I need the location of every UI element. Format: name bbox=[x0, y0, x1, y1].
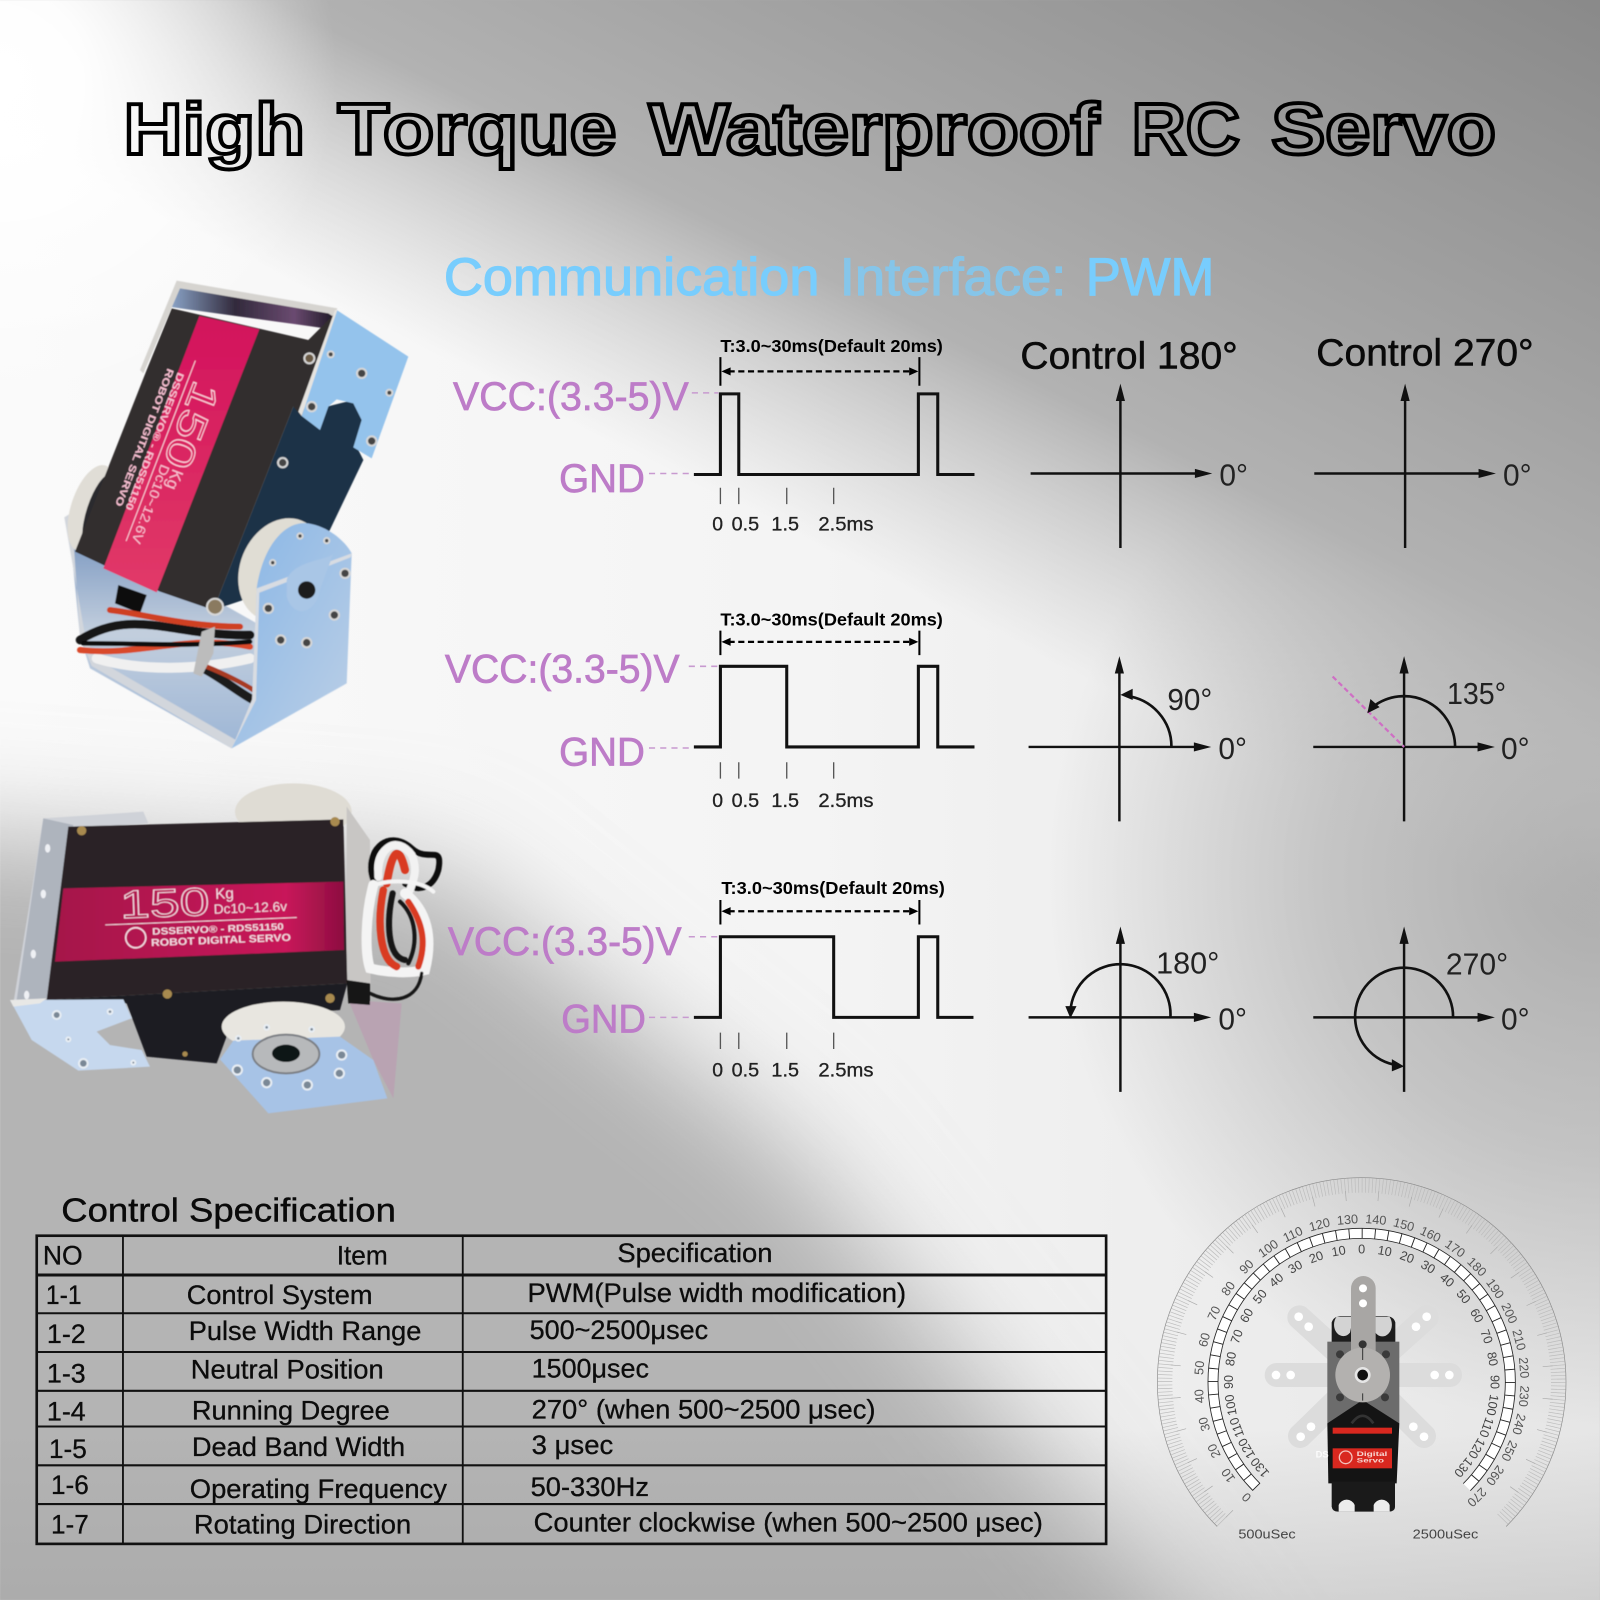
axes: 90 degrees: 0° bbox=[1218, 732, 1247, 766]
row 1-7: Counter clockwise (when 500~2500 μsec) bbox=[534, 1508, 1043, 1538]
dial outer degree labels: 90 bbox=[1237, 1257, 1257, 1277]
row 1-5 bbox=[49, 1430, 613, 1464]
icon: digital servo: Servo bbox=[1357, 1457, 1384, 1464]
dial inner degree labels: 50 bbox=[1453, 1287, 1473, 1307]
heading: communication interface bbox=[444, 248, 1214, 307]
title: RC bbox=[1132, 89, 1240, 170]
dial outer degree labels: 230 bbox=[1516, 1385, 1532, 1407]
dial inner degree labels: 70 bbox=[1477, 1328, 1495, 1346]
row 1-4: 270° (when 500~2500 μsec) bbox=[532, 1394, 876, 1424]
timing scale: 1.5 bbox=[771, 790, 799, 812]
band lettering: Kg bbox=[215, 885, 234, 903]
timing scale: 0.5 bbox=[732, 790, 759, 812]
axes: 270 degrees: 270° bbox=[1446, 947, 1508, 981]
timing scale: 0.5 bbox=[732, 1060, 759, 1082]
voltage labels: VCC:(3.3-5)V bbox=[448, 920, 682, 964]
icon: digital servo: DS bbox=[1316, 1449, 1329, 1459]
axes: 180 degrees: 180° bbox=[1156, 946, 1219, 980]
dial inner degree labels: 60 bbox=[1237, 1306, 1256, 1325]
waveform bbox=[694, 666, 974, 747]
dial inner degree labels: 10 bbox=[1377, 1243, 1393, 1259]
dial inner degree labels: 90 bbox=[1487, 1375, 1501, 1389]
heading: communication interface: Communication bbox=[444, 248, 819, 307]
period label bbox=[720, 878, 945, 924]
voltage labels bbox=[448, 920, 718, 1042]
row 1-2: 500~2500μsec bbox=[530, 1315, 708, 1345]
period label: T:3.0~30ms(Default 20ms) bbox=[720, 336, 943, 356]
dial inner degree labels: 80 bbox=[1223, 1351, 1239, 1367]
dial inner degree labels: 40 bbox=[1266, 1270, 1286, 1290]
voltage labels bbox=[453, 375, 718, 501]
row 1-1: 1-1 bbox=[46, 1280, 82, 1310]
dial outer degree labels: 240 bbox=[1509, 1412, 1528, 1436]
dial outer degree labels: 180 bbox=[1464, 1255, 1489, 1279]
band lettering bbox=[104, 877, 298, 951]
dial outer degree labels: 50 bbox=[1192, 1360, 1207, 1375]
photo: servo in upright bracket bbox=[58, 281, 408, 748]
band lettering: 150 bbox=[154, 375, 228, 475]
faded horn positions bbox=[1272, 1312, 1454, 1441]
dial outer degree labels: 220 bbox=[1516, 1357, 1532, 1379]
dial inner degree labels: 120 bbox=[1465, 1436, 1488, 1461]
row 1-2 bbox=[47, 1315, 708, 1349]
band lettering: ROBOT DIGITAL SERVO bbox=[151, 933, 291, 949]
row 2: pulse width 1.5 ms bbox=[445, 610, 1530, 821]
dial inner degree labels: 10 bbox=[1330, 1243, 1347, 1259]
waveform bbox=[694, 937, 973, 1017]
timing scale: 0.5 bbox=[732, 514, 759, 536]
voltage labels: VCC:(3.3-5)V bbox=[453, 375, 689, 419]
dial inner degree labels: 60 bbox=[1467, 1306, 1486, 1325]
dial inner degree labels: 130 bbox=[1248, 1455, 1272, 1480]
dial inner degree labels: 100 bbox=[1484, 1393, 1501, 1417]
dial inner degree labels: 20 bbox=[1307, 1248, 1325, 1266]
title: Torque bbox=[338, 89, 616, 170]
title bbox=[123, 89, 1496, 170]
title: Servo bbox=[1271, 89, 1496, 170]
dial outer degree labels: 190 bbox=[1483, 1276, 1507, 1301]
dial inner degree labels: 0 bbox=[1358, 1242, 1365, 1256]
dial inner degree labels bbox=[1222, 1242, 1501, 1480]
table header: Item bbox=[337, 1240, 388, 1270]
label: 500uSec: 500uSec bbox=[1238, 1527, 1296, 1541]
dial outer degree labels: 170 bbox=[1442, 1237, 1468, 1261]
table header bbox=[43, 1238, 772, 1270]
dial outer degree labels: 0 bbox=[1239, 1490, 1254, 1504]
dial inner degree labels: 40 bbox=[1437, 1270, 1457, 1290]
heading: control specification: Control Specification bbox=[61, 1192, 396, 1229]
dial inner degree labels: 110 bbox=[1476, 1415, 1496, 1439]
title: Waterproof bbox=[649, 89, 1100, 170]
axes: neutral 270 bbox=[1314, 384, 1532, 548]
table header: Specification bbox=[617, 1238, 772, 1268]
dial outer degree labels: 150 bbox=[1392, 1215, 1416, 1234]
row 1-3: 1-3 bbox=[47, 1359, 86, 1389]
timing scale bbox=[712, 762, 873, 812]
dial inner degree labels: 20 bbox=[1398, 1248, 1416, 1266]
axes: 135 degrees: 135° bbox=[1447, 677, 1506, 711]
band lettering: Dc10~12.6V bbox=[129, 462, 172, 546]
timing scale: 0 bbox=[712, 790, 723, 812]
timing scale: 1.5 bbox=[771, 1060, 799, 1082]
band lettering: DSSERVO® - RDS51150 bbox=[122, 371, 185, 512]
band lettering: ROBOT DIGITAL SERVO bbox=[112, 367, 175, 508]
axes: neutral 270: 0° bbox=[1503, 459, 1532, 493]
voltage labels: GND bbox=[559, 730, 645, 774]
dial outer degree labels: 270 bbox=[1464, 1485, 1489, 1509]
row 1-5: 3 μsec bbox=[532, 1430, 613, 1460]
row 1-6 bbox=[51, 1470, 649, 1504]
dial outer degree labels: 110 bbox=[1281, 1224, 1305, 1245]
dial outer degree labels: 10 bbox=[1219, 1466, 1238, 1485]
timing scale bbox=[712, 488, 873, 536]
heading: communication interface: Interface: bbox=[840, 248, 1066, 307]
dial inner degree labels: 30 bbox=[1286, 1258, 1305, 1277]
icon: digital servo: Digital bbox=[1357, 1451, 1388, 1458]
row 1-4: 1-4 bbox=[47, 1396, 86, 1426]
row 1-3: 1500μsec bbox=[532, 1354, 649, 1384]
row 1-6: 50-330Hz bbox=[531, 1472, 649, 1502]
row 1-1 bbox=[46, 1278, 906, 1310]
row 1-6: 1-6 bbox=[51, 1470, 89, 1500]
band lettering: Dc10~12.6v bbox=[213, 899, 288, 917]
axes: neutral 180: 0° bbox=[1219, 459, 1248, 493]
title: High bbox=[123, 89, 305, 170]
dial outer degree labels: 120 bbox=[1308, 1215, 1332, 1234]
row 1-3: Neutral Position bbox=[191, 1355, 384, 1385]
dial outer degree labels: 30 bbox=[1196, 1415, 1213, 1433]
dial outer degree labels: 20 bbox=[1205, 1441, 1224, 1460]
voltage labels: VCC:(3.3-5)V bbox=[445, 648, 680, 692]
row 1-7: Rotating Direction bbox=[194, 1510, 411, 1540]
label: 2500uSec: 2500uSec bbox=[1413, 1527, 1478, 1541]
row 1-4: Running Degree bbox=[192, 1395, 390, 1425]
dial outer degree labels: 130 bbox=[1336, 1212, 1359, 1228]
servo protractor dial bbox=[1157, 1178, 1566, 1541]
dial inner degree labels: 80 bbox=[1484, 1351, 1500, 1367]
axes: neutral 180 bbox=[1031, 384, 1248, 548]
heading: control 270: Control 270° bbox=[1316, 331, 1534, 373]
dial inner degree labels: 90 bbox=[1222, 1375, 1236, 1389]
period label: T:3.0~30ms(Default 20ms) bbox=[720, 610, 943, 630]
voltage labels: GND bbox=[561, 998, 646, 1042]
band lettering: Kg bbox=[162, 467, 187, 492]
band lettering: DSSERVO® - RDS51150 bbox=[152, 922, 284, 938]
heading: control 180: Control 180° bbox=[1020, 334, 1238, 376]
axes: 135 degrees: 0° bbox=[1501, 732, 1530, 766]
axes: 180 degrees bbox=[1029, 927, 1247, 1092]
axes: 90 degrees bbox=[1029, 656, 1247, 821]
row 1: pulse width 0.5 ms bbox=[453, 331, 1534, 548]
timing scale bbox=[712, 1033, 873, 1082]
row 1-3 bbox=[47, 1354, 649, 1389]
row 1-4 bbox=[47, 1394, 876, 1426]
dial outer degree labels: 100 bbox=[1256, 1237, 1281, 1261]
period label bbox=[720, 610, 943, 655]
photo: servo lying in bracket bbox=[10, 783, 439, 1113]
dial outer degree labels: 210 bbox=[1509, 1328, 1528, 1352]
dial outer degree labels: 40 bbox=[1192, 1389, 1207, 1404]
dial inner degree labels: 70 bbox=[1228, 1328, 1246, 1346]
row 1-1: Control System bbox=[187, 1280, 372, 1310]
voltage labels bbox=[445, 648, 718, 774]
dial outer degree labels: 250 bbox=[1498, 1438, 1520, 1463]
row 1-6: Operating Frequency bbox=[190, 1474, 448, 1504]
row 1-5: Dead Band Width bbox=[192, 1432, 405, 1462]
axes: 90 degrees: 90° bbox=[1167, 683, 1212, 717]
dial inner degree labels: 110 bbox=[1227, 1415, 1247, 1439]
row 1-5: 1-5 bbox=[49, 1434, 87, 1464]
dial inner degree labels: 130 bbox=[1451, 1455, 1475, 1480]
timing scale: 1.5 bbox=[771, 514, 799, 536]
band lettering bbox=[102, 351, 234, 556]
table: control specification bbox=[37, 1236, 1106, 1544]
band lettering: 150 bbox=[119, 880, 210, 927]
axes: 135 degrees bbox=[1313, 656, 1530, 821]
dial inner degree labels: 50 bbox=[1250, 1287, 1270, 1307]
voltage labels: GND bbox=[559, 457, 645, 501]
dial outer degree labels bbox=[1192, 1212, 1532, 1509]
axes: 270 degrees: 0° bbox=[1501, 1003, 1530, 1037]
axes: 180 degrees: 0° bbox=[1218, 1003, 1247, 1037]
row 1-7 bbox=[51, 1508, 1043, 1540]
timing scale: 2.5ms bbox=[818, 1060, 873, 1082]
table grid bbox=[37, 1236, 1106, 1544]
timing scale: 2.5ms bbox=[818, 514, 873, 536]
timing scale: 2.5ms bbox=[818, 790, 873, 812]
row 3: pulse width 2.5 ms bbox=[448, 878, 1530, 1092]
dial outer degree labels: 70 bbox=[1205, 1304, 1224, 1323]
row 1-2: Pulse Width Range bbox=[189, 1316, 421, 1346]
row 1-2: 1-2 bbox=[47, 1319, 86, 1349]
dial outer degree labels: 160 bbox=[1418, 1224, 1443, 1245]
dial inner degree labels: 120 bbox=[1235, 1436, 1258, 1461]
dial outer degree labels: 140 bbox=[1365, 1212, 1387, 1228]
dial outer degree labels: 60 bbox=[1196, 1331, 1213, 1349]
icon: digital servo bbox=[1316, 1284, 1399, 1512]
timing scale: 0 bbox=[712, 1060, 723, 1082]
waveform bbox=[694, 394, 974, 474]
dial outer degree labels: 80 bbox=[1219, 1279, 1238, 1298]
heading: communication interface: PWM bbox=[1086, 248, 1214, 307]
timing scale: 0 bbox=[712, 514, 723, 536]
dial outer degree labels: 200 bbox=[1498, 1301, 1520, 1326]
axes: 270 degrees bbox=[1313, 927, 1530, 1092]
row 1-1: PWM(Pulse width modification) bbox=[528, 1278, 906, 1308]
dial outer degree labels: 260 bbox=[1483, 1463, 1507, 1488]
row 1-7: 1-7 bbox=[51, 1510, 89, 1540]
dial tick scale bbox=[1157, 1178, 1566, 1527]
period label bbox=[720, 336, 943, 386]
table header: NO bbox=[43, 1240, 83, 1270]
period label: T:3.0~30ms(Default 20ms) bbox=[721, 878, 945, 898]
dial inner degree labels: 30 bbox=[1418, 1258, 1438, 1277]
dial inner degree labels: 100 bbox=[1222, 1393, 1240, 1417]
